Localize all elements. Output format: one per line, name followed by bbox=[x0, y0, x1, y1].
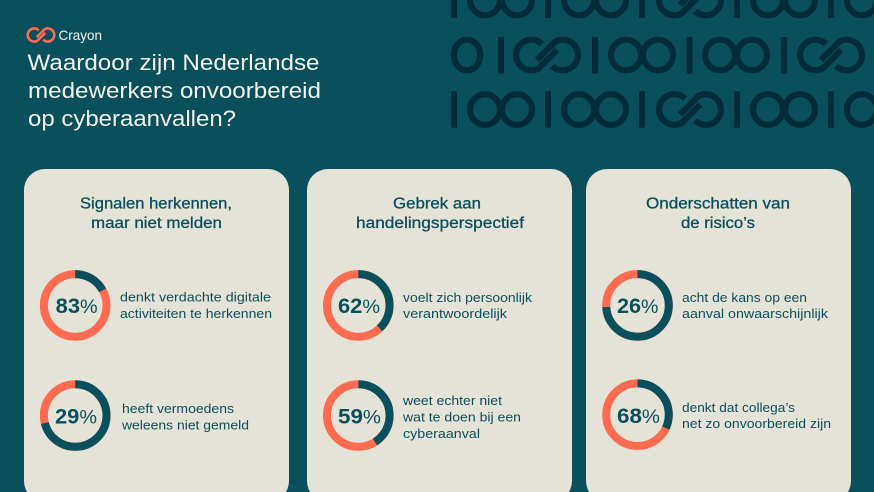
stat text: 29%: weleens niet gemeld bbox=[121, 417, 249, 432]
card background bbox=[307, 169, 572, 492]
title bbox=[28, 50, 321, 131]
stat text: 83%: denkt verdachte digitale bbox=[120, 290, 271, 305]
stat text: 59%: weet echter niet bbox=[402, 393, 502, 408]
donut chart: 83%: 83% bbox=[56, 295, 98, 318]
donut chart: 29%: 29% bbox=[55, 406, 97, 428]
donut chart: 26%: 26% bbox=[617, 295, 659, 318]
stat text: 68%: net zo onvoorbereid zijn bbox=[682, 416, 831, 431]
stat text: 62%: verantwoordelijk bbox=[403, 306, 508, 321]
panel heading: Onderschatten van bbox=[646, 196, 790, 212]
title: op cyberaanvallen? bbox=[28, 106, 236, 131]
panel: gebrek aan handelingsperspectief bbox=[307, 169, 572, 492]
stat text: 83%: activiteiten te herkennen bbox=[120, 306, 272, 321]
donut chart: 68%: 68% bbox=[617, 405, 660, 428]
stat text: 59%: wat te doen bij een bbox=[402, 410, 521, 424]
icon: Crayon link mark bbox=[28, 28, 54, 42]
donut chart: 29% bbox=[44, 384, 107, 447]
panel heading: Signalen herkennen, bbox=[80, 196, 232, 212]
stat text: 59%: cyberaanval bbox=[403, 426, 480, 441]
donut chart: 59%: 59% bbox=[338, 406, 381, 428]
stat text: 26%: acht de kans op een bbox=[682, 290, 807, 305]
panel heading bbox=[356, 196, 525, 232]
panel heading: maar niet melden bbox=[91, 215, 222, 232]
stat text: 26% bbox=[682, 290, 829, 321]
panel heading bbox=[80, 196, 232, 232]
stat text: 68%: denkt dat collega’s bbox=[682, 400, 796, 415]
donut chart: 62% bbox=[327, 274, 390, 337]
stat text: 62%: voelt zich persoonlijk bbox=[403, 290, 533, 305]
panel: signalen herkennen bbox=[24, 169, 289, 492]
donut chart: 59% bbox=[327, 384, 390, 447]
panel heading: handelingsperspectief bbox=[356, 215, 525, 232]
panel: onderschatten van de risico's bbox=[586, 169, 851, 492]
stat text: 83% bbox=[120, 290, 272, 321]
stat text: 29%: heeft vermoedens bbox=[122, 401, 235, 416]
logo: Crayon bbox=[28, 27, 102, 43]
title: medewerkers onvoorbereid bbox=[28, 78, 321, 103]
card background bbox=[24, 169, 289, 492]
donut chart: 62%: 62% bbox=[338, 295, 380, 318]
donut chart: 68% bbox=[606, 383, 669, 446]
title: Waardoor zijn Nederlandse bbox=[28, 50, 319, 75]
panel heading: de risico’s bbox=[681, 215, 755, 232]
binary pattern background bbox=[451, 0, 874, 128]
stat text: 59% bbox=[402, 393, 521, 441]
stat text: 62% bbox=[403, 290, 533, 321]
stat text: 68% bbox=[682, 400, 831, 431]
donut chart: 83% bbox=[44, 274, 107, 337]
panel heading bbox=[646, 196, 790, 232]
donut chart: 26% bbox=[606, 274, 669, 337]
stat text: 29% bbox=[121, 401, 249, 432]
wordmark: Crayon bbox=[58, 27, 102, 43]
panel heading: Gebrek aan bbox=[393, 196, 481, 212]
stat text: 26%: aanval onwaarschijnlijk bbox=[682, 306, 829, 321]
card background bbox=[586, 169, 851, 492]
